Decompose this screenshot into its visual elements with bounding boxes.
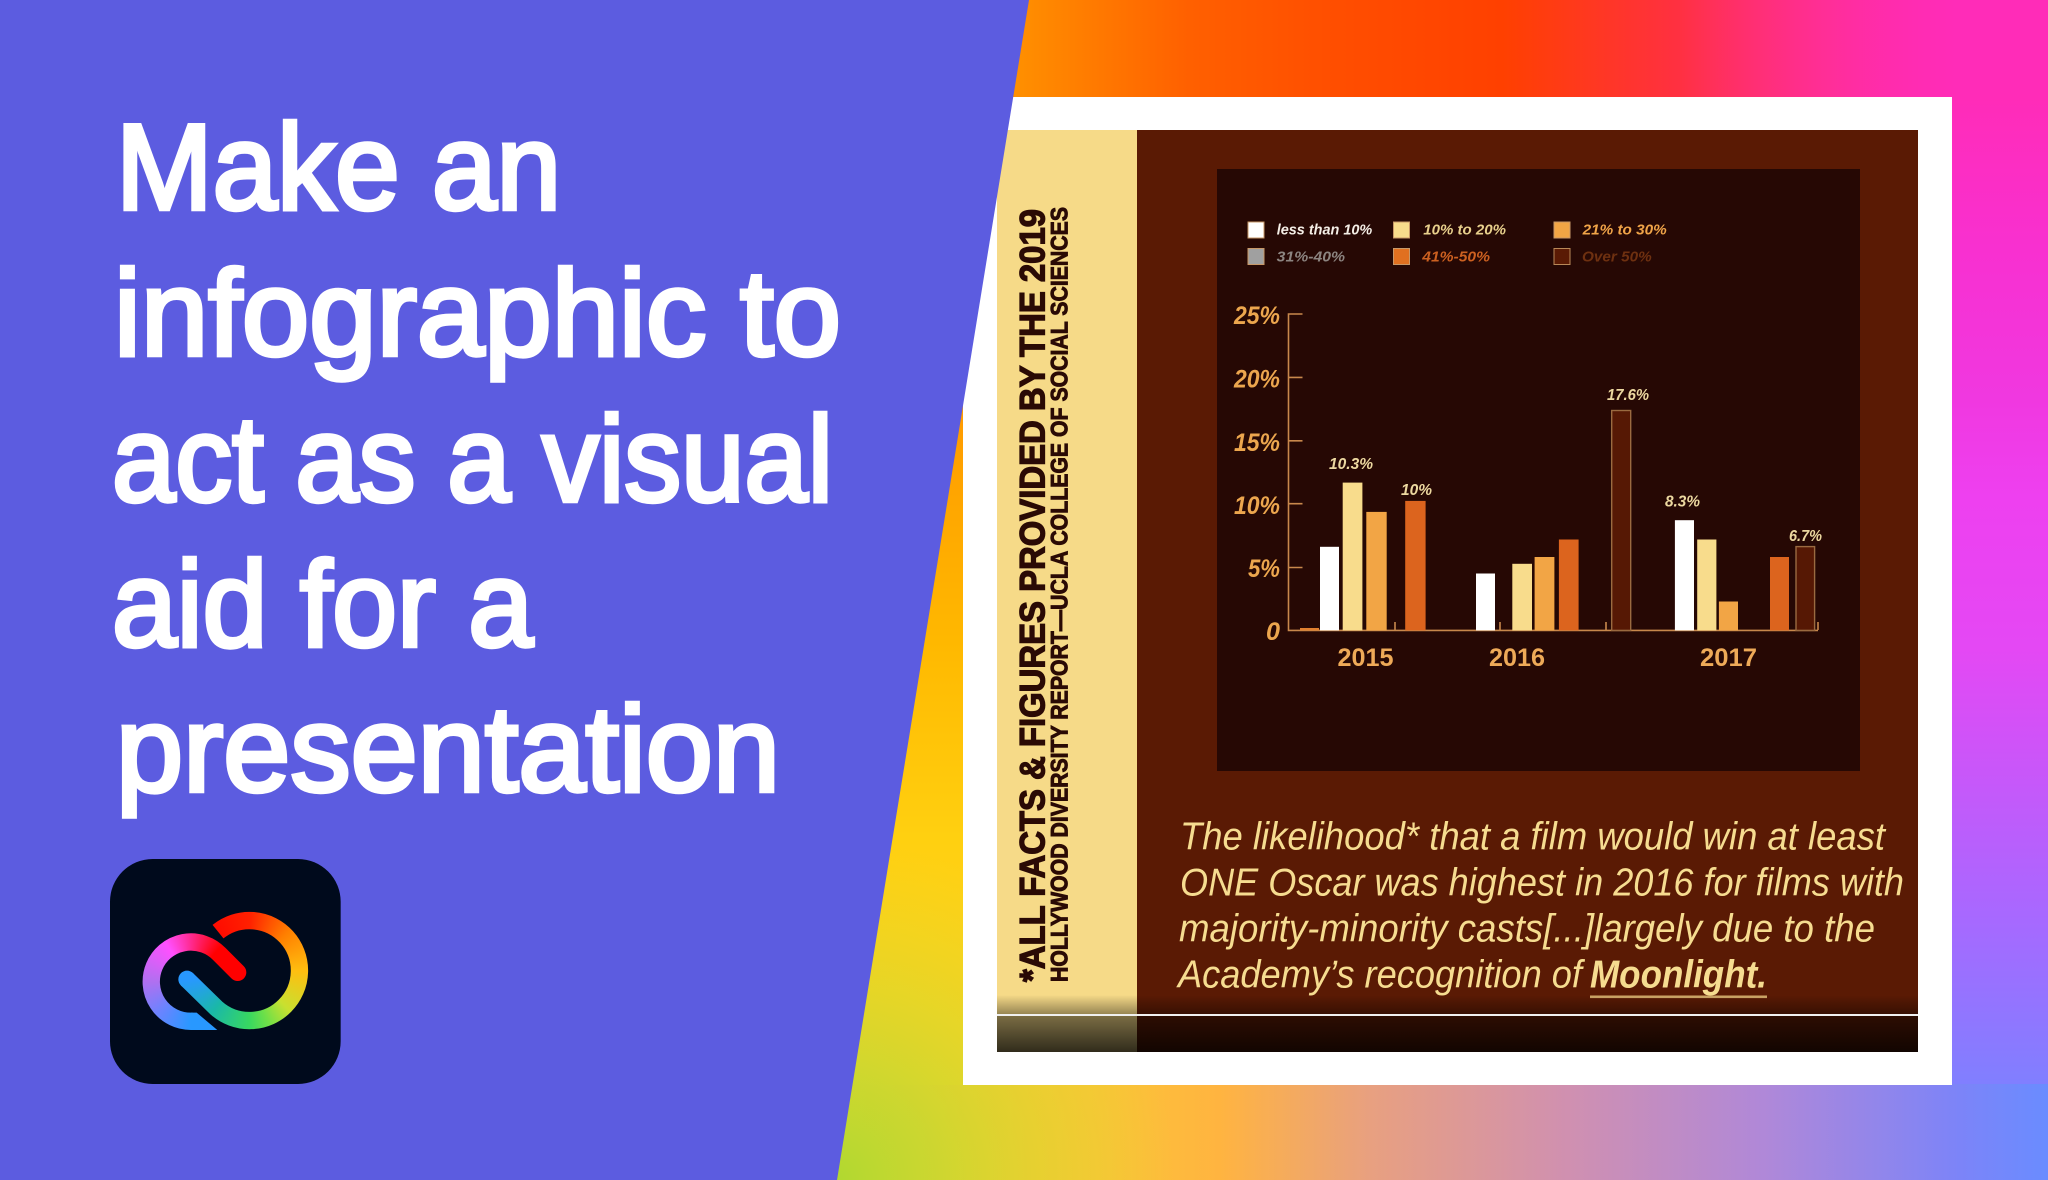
y axis with ticks and baseline — [1288, 314, 1818, 630]
data labels: 10% — [1401, 482, 1432, 499]
title: presentation — [116, 681, 780, 817]
bar chart — [1233, 302, 1822, 672]
data labels: 10.3% — [1329, 456, 1373, 473]
legend: 31%-40% — [1248, 248, 1345, 265]
legend: 10% to 20%: 10% to 20% — [1423, 222, 1506, 239]
caption paragraph: Moonlight. — [1590, 954, 1767, 997]
data labels: 17.6% — [1607, 387, 1649, 404]
year labels — [1338, 644, 1757, 672]
gradient background: lime corner glow — [800, 840, 1180, 1180]
title: Make an — [116, 99, 561, 235]
year labels: 2016 — [1489, 644, 1545, 672]
caption paragraph — [1176, 815, 1904, 998]
y axis labels: 10% — [1234, 492, 1280, 520]
data labels: 6.7% — [1789, 528, 1822, 545]
gradient background: right strip — [1950, 97, 2048, 1087]
gradient background: left strip — [800, 97, 965, 1085]
legend: 31%-40%: 31%-40% — [1277, 248, 1345, 265]
bottom shade of video frame — [997, 995, 1918, 1052]
source subheading: HOLLYWOOD DIVERSITY REPORT—UCLA COLLEGE OF SOCIAL SCIENCES — [1046, 207, 1074, 982]
bars 2017 — [1675, 520, 1815, 630]
source heading: *ALL FACTS & FIGURES PROVIDED BY THE 2019 — [1014, 209, 1052, 982]
gradient background: top strip — [800, 0, 2048, 98]
y axis labels — [1233, 302, 1280, 646]
title: infographic to — [114, 245, 841, 381]
legend: over 50%: Over 50% — [1582, 248, 1652, 265]
dark chart panel — [1217, 169, 1860, 771]
white frame — [963, 97, 1952, 1085]
logo tile — [110, 859, 341, 1084]
legend: less than 10%: less than 10% — [1277, 222, 1372, 239]
logo right loop — [178, 912, 308, 1030]
gradient background: bottom strip — [800, 1084, 2048, 1180]
year labels: 2017 — [1700, 644, 1757, 672]
legend: 21% to 30%: 21% to 30% — [1582, 222, 1667, 239]
panel: framed infographic — [963, 97, 1952, 1085]
year labels: 2015 — [1338, 644, 1394, 672]
icon: Creative Cloud Express logo — [110, 859, 341, 1084]
y axis labels: 5% — [1248, 555, 1280, 583]
gradient background: pink top-right corner — [1680, 0, 2048, 98]
caption paragraph: ONE Oscar was highest in 2016 for films with — [1180, 862, 1904, 905]
progress line — [997, 1014, 1918, 1016]
y axis labels: 20% — [1233, 366, 1280, 394]
data labels — [1329, 387, 1822, 545]
y axis labels: 15% — [1234, 429, 1280, 457]
y axis labels: 0 — [1266, 618, 1280, 646]
caption paragraph: majority-minority casts[...]largely due to the — [1179, 908, 1875, 951]
caption paragraph: The likelihood* that a film would win at least — [1180, 815, 1887, 858]
logo left loop — [142, 933, 246, 1030]
data labels: 8.3% — [1665, 493, 1700, 510]
vertical source text — [1014, 207, 1074, 982]
title: aid for a — [112, 536, 533, 672]
caption paragraph: Academy’s recognition of — [1176, 954, 1586, 997]
legend — [1248, 222, 1667, 265]
purple slanted panel — [0, 0, 1029, 1180]
y axis labels: 25% — [1233, 302, 1280, 330]
legend: 41%-50%: 41%-50% — [1421, 248, 1490, 265]
bars 2016 — [1476, 410, 1631, 630]
brown poster background — [997, 130, 1918, 1052]
title — [112, 99, 841, 817]
legend: 41%-50% — [1394, 248, 1490, 265]
bars 2015 — [1300, 483, 1426, 630]
title: act as a visual — [112, 391, 833, 527]
yellow source strip — [997, 130, 1137, 1052]
